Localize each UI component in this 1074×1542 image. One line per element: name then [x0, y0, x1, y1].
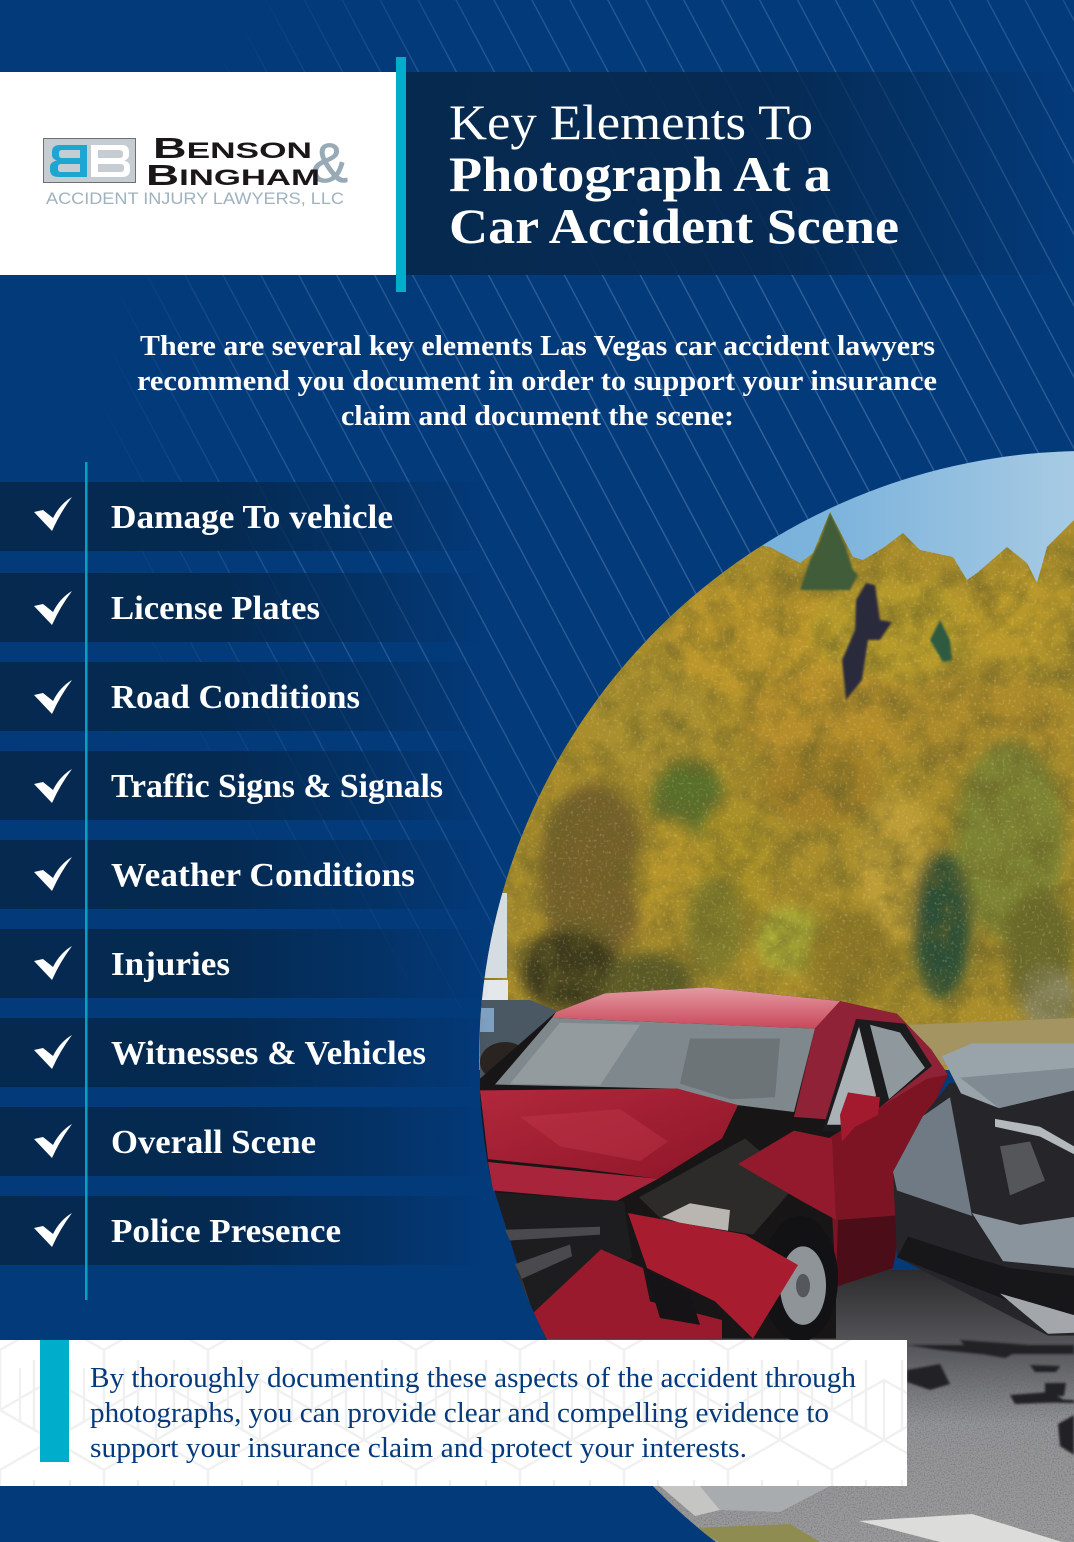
logo mark [44, 138, 136, 182]
intro text: There are several key elements Las Vegas car accident lawyers [140, 331, 935, 362]
road grain [654, 1374, 1074, 1542]
crushed parts [1000, 1141, 1045, 1195]
checklist vertical rule [85, 462, 88, 1300]
item: damage to vehicle [0, 482, 490, 551]
intro text [137, 331, 937, 432]
logo name: Benson: B ENSON [153, 133, 312, 165]
lower trim [897, 1237, 1074, 1317]
side windows [827, 1027, 876, 1125]
body [480, 987, 948, 1339]
side panel [794, 1001, 948, 1122]
window frame [826, 1018, 932, 1120]
logo tagline: ACCIDENT INJURY LAWYERS, LLC [46, 189, 344, 208]
closing callout [0, 1340, 907, 1486]
header: logo panel [0, 72, 396, 275]
hub [796, 1274, 810, 1297]
tire [788, 1251, 838, 1340]
callout accent [40, 1340, 69, 1462]
callout text: photographs, you can provide clear and compelling evidence to [90, 1397, 829, 1429]
title [449, 94, 899, 254]
right B [91, 145, 130, 177]
hood shade [960, 1068, 1074, 1108]
callout text: By thoroughly documenting these aspects of the accident through [90, 1362, 856, 1394]
wheel arch gap [655, 1302, 700, 1325]
title: Key Elements To [449, 94, 813, 150]
title: Photograph At a [449, 146, 831, 202]
callout text: support your insurance claim and protect your interests. [90, 1432, 747, 1464]
item: road conditions: Road Conditions [111, 679, 360, 716]
front bumper [628, 1213, 798, 1339]
logo ampersand: & [311, 131, 348, 194]
red car [480, 987, 948, 1342]
item: weather conditions: Weather Conditions [111, 857, 415, 894]
hood lower strip [488, 1162, 658, 1201]
item: witnesses and vehicles: Witnesses & Vehicles [111, 1035, 426, 1072]
chassis [893, 1083, 1074, 1336]
dark spruce [842, 583, 892, 700]
left B [50, 145, 87, 177]
exposed engine [639, 1139, 798, 1235]
item: witnesses and vehicles [0, 1018, 490, 1087]
hood crease highlight [520, 1109, 668, 1161]
autumn tree line [470, 500, 1074, 1070]
item: license plates: License Plates [111, 590, 320, 627]
title: Car Accident Scene [449, 198, 899, 254]
windshield [495, 1018, 815, 1112]
item: license plates [0, 573, 490, 642]
side mirror [840, 1092, 880, 1141]
intro text: recommend you document in order to support your insurance [137, 366, 937, 397]
item: road conditions [0, 662, 490, 731]
item: overall scene: Overall Scene [111, 1124, 316, 1161]
windshield reflections [510, 1023, 640, 1086]
callout text [90, 1362, 856, 1464]
item: damage to vehicle: Damage To vehicle [111, 499, 393, 536]
item: overall scene [0, 1107, 490, 1176]
grille [495, 1192, 617, 1312]
grey car [893, 1043, 1074, 1336]
rear side window [870, 1025, 925, 1099]
background truck and car [480, 893, 560, 1090]
item: police presence [0, 1196, 490, 1265]
windshield interior [680, 1038, 780, 1099]
chrome trim [995, 1119, 1074, 1154]
item: weather conditions [0, 840, 490, 909]
item: police presence: Police Presence [111, 1213, 341, 1250]
header: title band [406, 72, 1074, 275]
door lower tone [836, 1216, 896, 1286]
item: traffic signs and signals [0, 751, 490, 820]
torn bumper [972, 1213, 1074, 1268]
sky [647, 451, 1074, 640]
logo name: Bingham: B INGHAM [146, 160, 320, 192]
intro text: claim and document the scene: [341, 401, 734, 432]
road markings [660, 1486, 1062, 1542]
diagonal line texture [141, 0, 1074, 980]
debris [907, 1340, 1074, 1455]
header: teal accent bar [396, 57, 406, 292]
lower strip [1000, 1294, 1074, 1334]
hood [480, 1088, 738, 1179]
small spruce [930, 620, 952, 662]
item: traffic signs and signals: Traffic Signs & Signals [111, 768, 443, 805]
lower bumper [533, 1249, 722, 1339]
checklist [0, 482, 490, 1265]
item: injuries [0, 929, 490, 998]
road surface [470, 1270, 1074, 1542]
green spruce [800, 512, 858, 590]
door [828, 1075, 948, 1287]
rim [780, 1246, 826, 1325]
roof [552, 987, 840, 1029]
grille slats [505, 1227, 600, 1279]
fender [893, 1097, 972, 1216]
fender [738, 1131, 836, 1220]
hood [942, 1043, 1074, 1108]
engine highlight [662, 1203, 730, 1231]
item: injuries: Injuries [111, 946, 230, 983]
roadside grass [908, 1018, 1074, 1065]
photo: crashed cars at roadside [470, 440, 1074, 1542]
